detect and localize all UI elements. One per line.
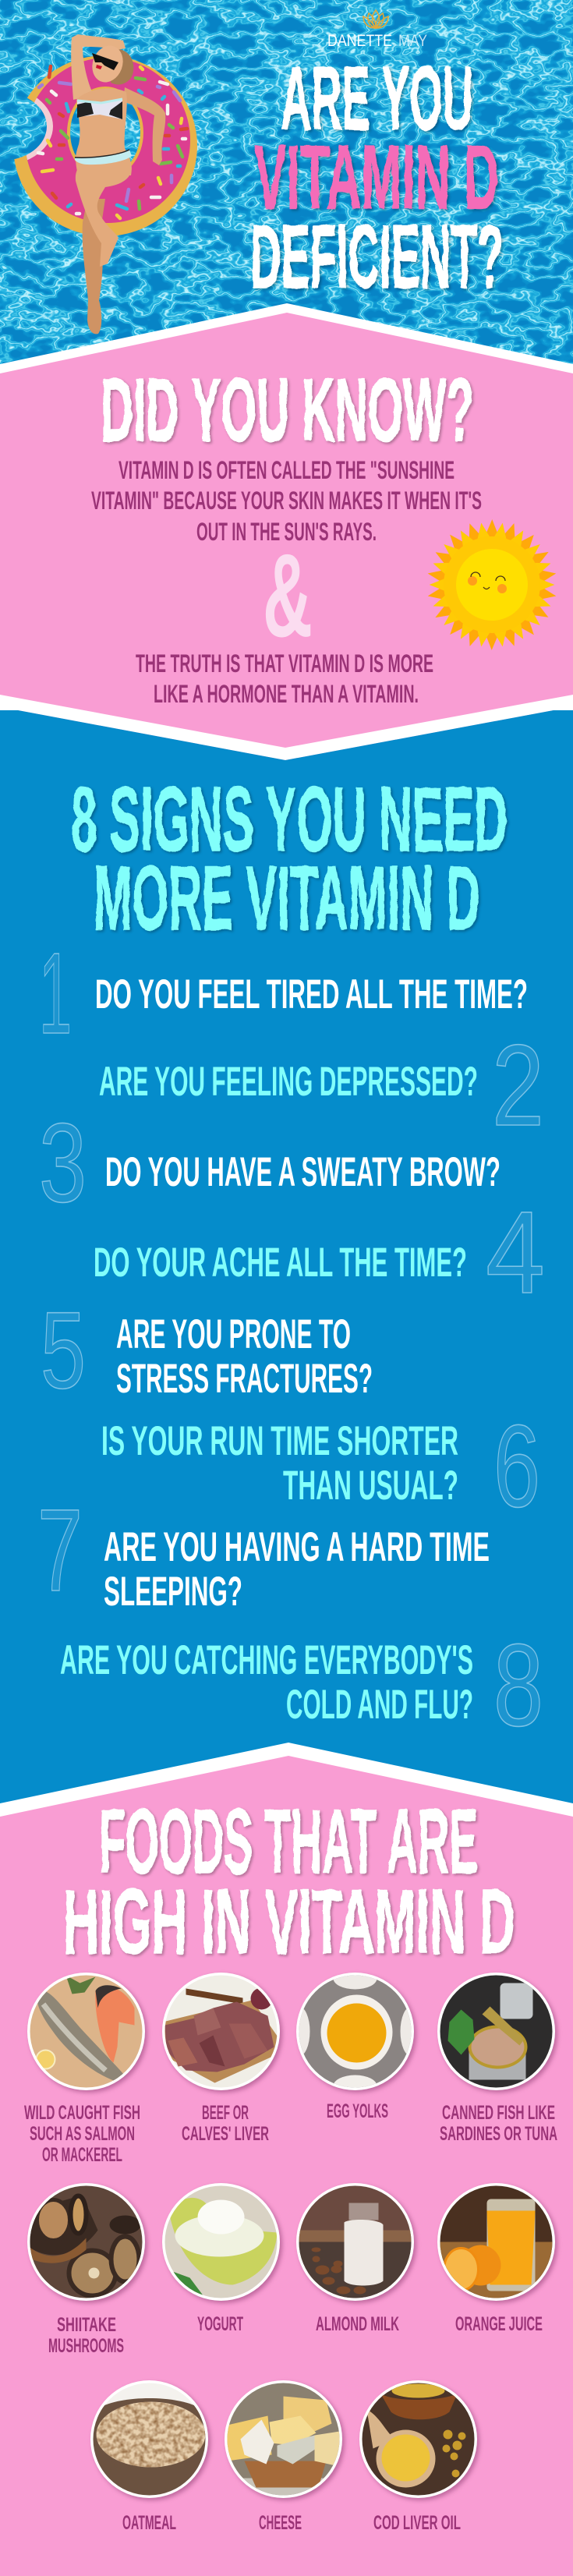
panel pink fill: [0, 1756, 573, 2576]
logo: Danette May: [327, 10, 427, 50]
icon: gold lotus: [363, 10, 388, 28]
number 8: 8: [493, 1619, 543, 1750]
ampersand: &: [263, 529, 313, 662]
text block: more like a hormone: LIKE A HORMONE THAN A VITAMIN.: [154, 680, 419, 708]
heading: foods high in vitamin d: [63, 1790, 515, 1973]
sign 6: [101, 1418, 458, 1509]
photo: cheese: [225, 2380, 342, 2498]
photo: oatmeal: [90, 2380, 208, 2498]
donut float: [0, 55, 197, 236]
photo: fish and salmon: [27, 1973, 145, 2090]
blue background: [0, 710, 573, 1809]
sign 5: STRESS FRACTURES?: [116, 1356, 373, 1402]
photo: yogurt: [162, 2183, 280, 2301]
photo: shiitake mushrooms: [27, 2183, 145, 2301]
sprinkles: [38, 66, 187, 218]
number 1: 1: [39, 929, 72, 1058]
label: cheese: CHEESE: [259, 2512, 302, 2534]
panel white border: [0, 1743, 573, 1824]
title: [250, 48, 504, 307]
sign 5: [116, 1311, 373, 1402]
label: almond milk: ALMOND MILK: [316, 2313, 399, 2335]
label: beef or calves' liver: CALVES' LIVER: [182, 2123, 269, 2145]
text block: sunshine vitamin: OUT IN THE SUN'S RAYS.: [196, 518, 377, 546]
brand name: DANETTE: [327, 32, 392, 50]
panel: 8 signs: [0, 710, 573, 1809]
number 6: 6: [493, 1400, 540, 1531]
label: oatmeal: OATMEAL: [122, 2512, 176, 2534]
photo: beef liver: [162, 1973, 280, 2090]
panel pink fill: [0, 313, 573, 748]
label: shiitake mushrooms: MUSHROOMS: [48, 2335, 124, 2357]
sign 6: THAN USUAL?: [283, 1463, 458, 1509]
label: beef or calves' liver: [182, 2102, 269, 2145]
photo: orange juice: [437, 2183, 555, 2301]
number 5: 5: [41, 1289, 86, 1411]
sign 7: SLEEPING?: [104, 1569, 242, 1615]
label: wild caught fish: OR MACKEREL: [42, 2144, 122, 2166]
woman: [71, 34, 165, 334]
panel: did you know: [0, 303, 573, 760]
label: cod liver oil: COD LIVER OIL: [373, 2512, 461, 2534]
label: wild caught fish: SUCH AS SALMON: [30, 2123, 135, 2145]
panel: foods: [0, 1743, 573, 2576]
background: pool water: [0, 0, 573, 382]
number 3: 3: [39, 1100, 87, 1226]
illustration: woman on donut float: [0, 34, 197, 334]
photo: canned fish: [437, 1973, 555, 2090]
brand name second word: MAY: [398, 32, 427, 50]
photo: almond milk: [296, 2183, 414, 2301]
label: egg yolks: EGG YOLKS: [327, 2100, 388, 2122]
heading: 8 signs you need more vitamin d: [71, 768, 508, 949]
text block: more like a hormone: [136, 649, 433, 708]
sign 8: [60, 1637, 473, 1728]
label: shiitake mushrooms: [48, 2314, 124, 2357]
label: beef or calves' liver: BEEF OR: [202, 2102, 249, 2124]
sign 7: [104, 1524, 490, 1615]
label: canned fish: [440, 2102, 557, 2145]
label: yogurt: YOGURT: [197, 2313, 243, 2335]
text block: sunshine vitamin: [91, 456, 482, 546]
panel white border: [0, 303, 573, 760]
label: wild caught fish: [24, 2102, 140, 2166]
label: shiitake mushrooms: SHIITAKE: [57, 2314, 116, 2336]
photo: cod liver oil: [359, 2380, 477, 2498]
label: wild caught fish: WILD CAUGHT FISH: [24, 2102, 140, 2124]
photo: egg yolk: [296, 1973, 419, 2095]
icon: smiling sun: [416, 510, 568, 660]
number 4: 4: [486, 1187, 545, 1318]
number 2: 2: [492, 1021, 544, 1150]
sign 5: ARE YOU PRONE TO: [116, 1311, 351, 1357]
number 7: 7: [37, 1484, 83, 1615]
